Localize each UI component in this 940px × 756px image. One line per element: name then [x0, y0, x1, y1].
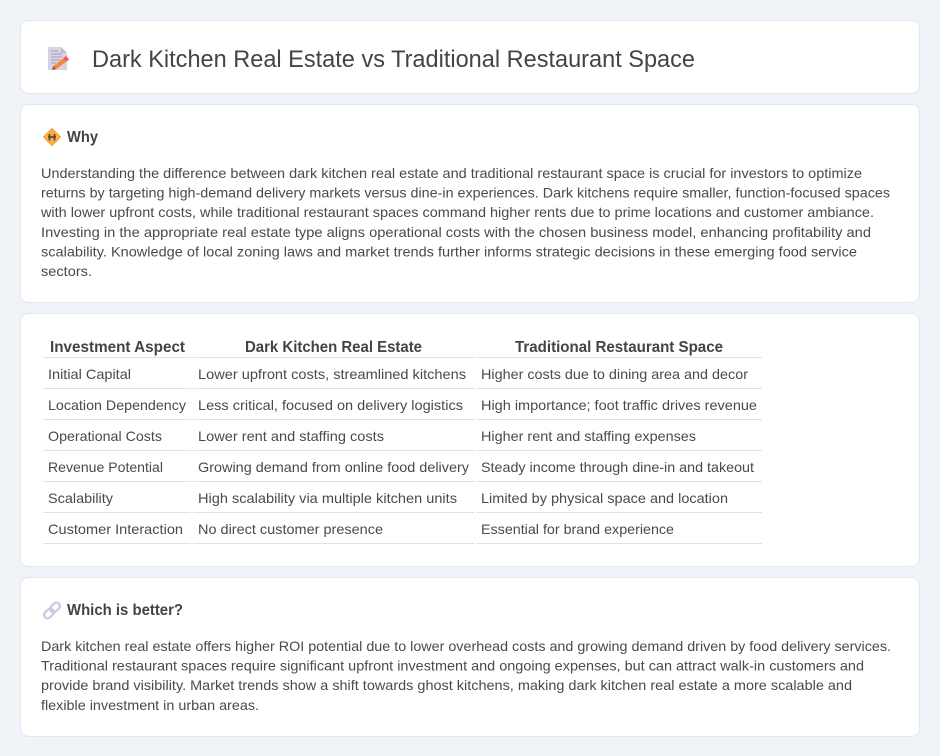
row: operational costs: Lower rent and staffing costs	[198, 428, 384, 444]
text block: Dark kitchen real estate offers higher ROI potential due to lower overhead costs and growing demand driven by food delivery services.	[41, 638, 891, 654]
text block: with lower upfront costs, while traditional restaurant spaces command higher rents due to prime locations and customer ambiance.	[40, 204, 874, 220]
row: revenue potential: Steady income through dine-in and takeout	[481, 459, 754, 475]
row: revenue potential	[48, 459, 754, 475]
text block: Understanding the difference between dark kitchen real estate and traditional restaurant space is crucial for investors to optimize	[41, 165, 862, 181]
row: operational costs: Higher rent and staffing expenses	[481, 428, 696, 444]
row: revenue potential: Revenue Potential	[48, 459, 163, 475]
row: initial capital: Initial Capital	[48, 366, 131, 382]
row: location dependency: Location Dependency	[48, 397, 186, 413]
table header	[50, 339, 723, 356]
text block	[40, 165, 890, 279]
row: scalability: Limited by physical space and location	[481, 490, 728, 506]
row: operational costs: Operational Costs	[48, 428, 162, 444]
icon: memo with pencil	[48, 47, 69, 70]
text block: sectors.	[41, 263, 92, 279]
row: location dependency: High importance; foot traffic drives revenue	[481, 397, 757, 413]
row: initial capital: Higher costs due to dining area and decor	[481, 366, 748, 382]
text block: Traditional restaurant spaces require significant upfront investment and ongoing expenses, but can attract walk-in customers and	[41, 658, 864, 674]
icon: orange diamond warning sign	[44, 128, 60, 146]
table header: Dark Kitchen Real Estate	[245, 339, 422, 356]
panel: comparison table	[20, 314, 920, 566]
heading: Dark Kitchen Real Estate vs Traditional Restaurant Space	[92, 46, 695, 73]
row: initial capital	[48, 366, 748, 382]
row: customer interaction: Customer Interaction	[48, 521, 183, 537]
row: scalability: High scalability via multiple kitchen units	[198, 490, 457, 506]
table header: Investment Aspect	[50, 339, 186, 356]
panel: which is better	[20, 578, 920, 736]
panel: title	[20, 20, 920, 94]
row: customer interaction: No direct customer presence	[198, 521, 383, 537]
row: initial capital: Lower upfront costs, streamlined kitchens	[198, 366, 466, 382]
panel: why	[20, 104, 920, 302]
table header: Traditional Restaurant Space	[515, 339, 723, 356]
heading: Which is better?	[67, 602, 183, 619]
row: location dependency	[48, 397, 757, 413]
row: customer interaction: Essential for brand experience	[481, 521, 674, 537]
text block: returns by targeting high-demand delivery markets versus dine-in experiences. Dark kitchens require smaller, function-focused spaces	[41, 185, 890, 201]
row: scalability: Scalability	[48, 490, 113, 506]
row: revenue potential: Growing demand from online food delivery	[198, 459, 469, 475]
text block	[41, 638, 891, 713]
icon: chain link	[43, 601, 61, 620]
row: scalability	[48, 490, 728, 506]
text block: scalability. Knowledge of local zoning laws and market trends further informs strategic decisions in these emerging food service	[41, 243, 857, 259]
row: operational costs	[48, 428, 696, 444]
text block: flexible investment in urban areas.	[41, 697, 259, 713]
row: customer interaction	[48, 521, 674, 537]
text block: provide brand visibility. Market trends show a shift towards ghost kitchens, making dark kitchen real estate a more scalable and	[41, 677, 852, 693]
row: location dependency: Less critical, focused on delivery logistics	[198, 397, 463, 413]
heading: Why	[67, 129, 98, 146]
text block: Investing in the appropriate real estate type aligns operational costs with the chosen business model, enhancing profitability and	[41, 224, 871, 240]
